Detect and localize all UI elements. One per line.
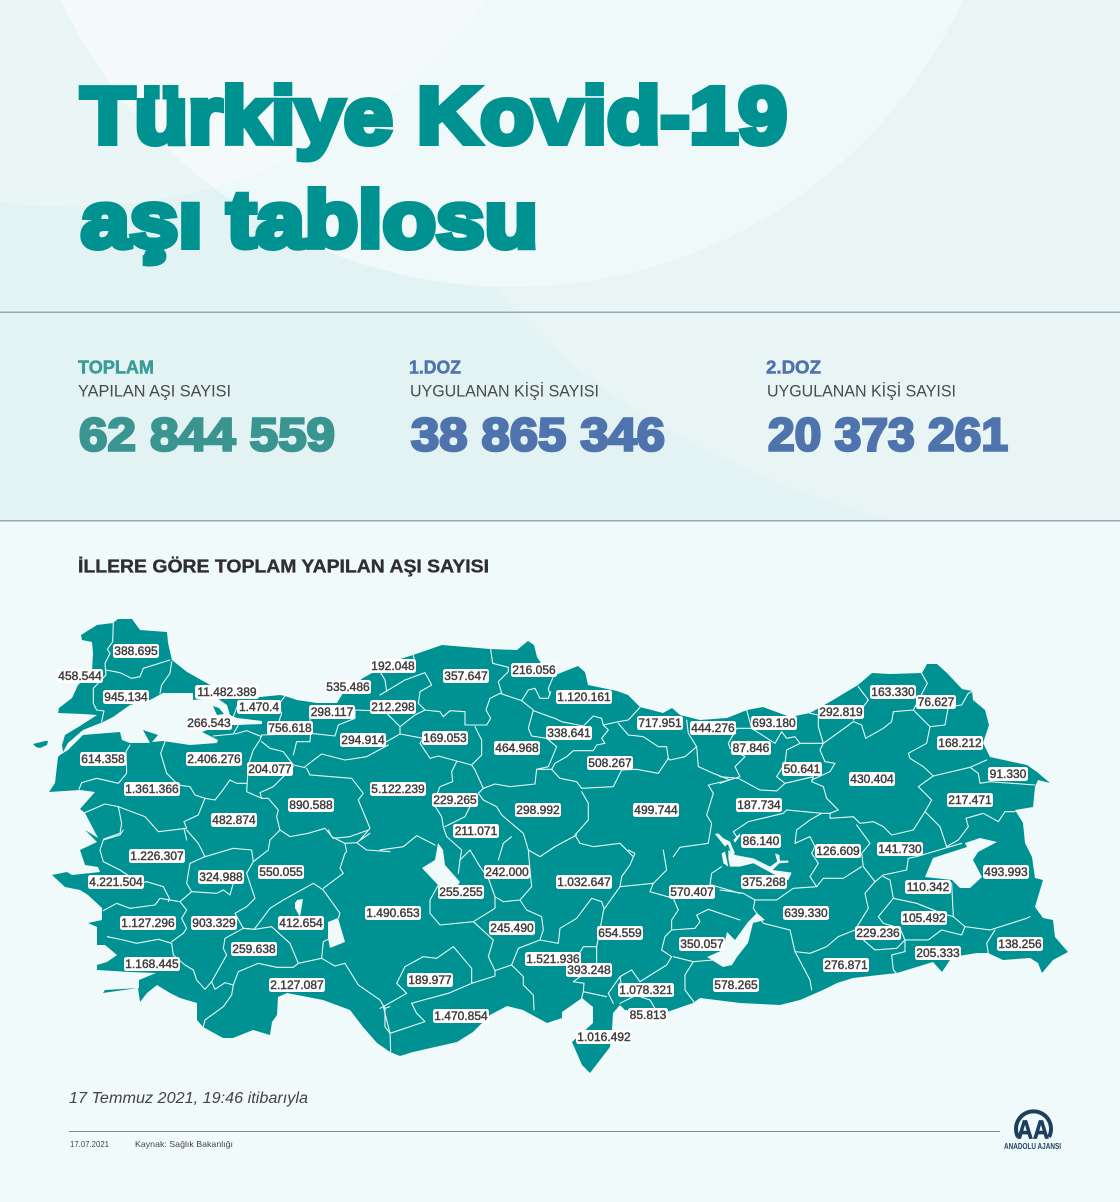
province value labels: 245.490 bbox=[490, 921, 534, 935]
province value labels: 126.609 bbox=[816, 844, 860, 858]
province value labels: 508.267 bbox=[588, 756, 632, 770]
province value labels: 464.968 bbox=[495, 741, 539, 755]
province value labels: 11.482.389 bbox=[197, 685, 257, 699]
province value labels: 163.330 bbox=[871, 685, 915, 699]
province value labels: 1.226.307 bbox=[130, 849, 184, 863]
province value labels: 1.521.936 bbox=[526, 952, 580, 966]
map of Turkey bbox=[33, 619, 1068, 1073]
province value labels: 350.057 bbox=[680, 937, 724, 951]
province value labels: 298.992 bbox=[516, 803, 560, 817]
Anadolu Ajansı logo: ANADOLU AJANSI bbox=[1004, 1141, 1061, 1151]
province value labels: 187.734 bbox=[737, 798, 781, 812]
stat: 1. doz: 1.DOZ bbox=[409, 358, 461, 378]
province value labels: 388.695 bbox=[114, 644, 158, 658]
province value labels: 255.255 bbox=[439, 885, 483, 899]
province value labels: 211.071 bbox=[455, 824, 498, 838]
province value labels: 614.358 bbox=[81, 752, 125, 766]
province value labels: 259.638 bbox=[232, 942, 276, 956]
province value labels: 229.236 bbox=[856, 926, 900, 940]
map section background bbox=[0, 521, 1120, 1202]
province value labels: 205.333 bbox=[916, 946, 960, 960]
province value labels: 292.819 bbox=[819, 705, 863, 719]
province value labels: 550.055 bbox=[259, 865, 303, 879]
province value labels: 756.618 bbox=[268, 721, 312, 735]
province value labels: 482.874 bbox=[212, 813, 256, 827]
title: aşı tablosu bbox=[81, 175, 538, 264]
province value labels: 493.993 bbox=[984, 865, 1028, 879]
province value labels: 266.543 bbox=[187, 716, 231, 730]
stat: toplam: 62 844 559 bbox=[79, 408, 335, 460]
province value labels: 212.298 bbox=[371, 700, 415, 714]
province value labels: 1.470.4 bbox=[239, 700, 279, 714]
province value labels: 86.140 bbox=[743, 834, 780, 848]
province value labels: 1.016.492 bbox=[577, 1030, 631, 1044]
footer rule bbox=[69, 1131, 1000, 1132]
province value labels: 535.486 bbox=[326, 680, 370, 694]
province value labels: 242.000 bbox=[485, 865, 529, 879]
province value labels: 1.470.854 bbox=[434, 1009, 488, 1023]
Anadolu Ajansı logo bbox=[1004, 1111, 1061, 1151]
province value labels: 412.654 bbox=[279, 916, 323, 930]
province value labels: 217.471 bbox=[948, 793, 992, 807]
province value labels: 499.744 bbox=[634, 803, 678, 817]
province value labels: 276.871 bbox=[824, 958, 868, 972]
province value labels: 87.846 bbox=[733, 741, 770, 755]
stat: toplam: YAPILAN AŞI SAYISI bbox=[78, 382, 231, 400]
stat: 2. doz: UYGULANAN KİŞİ SAYISI bbox=[767, 382, 956, 400]
province value labels: 85.813 bbox=[630, 1008, 667, 1022]
lakes bbox=[295, 833, 997, 967]
divider bottom bbox=[0, 520, 1120, 522]
province value labels: 141.730 bbox=[878, 842, 922, 856]
province value labels: 204.077 bbox=[248, 762, 292, 776]
province value labels: 430.404 bbox=[850, 772, 894, 786]
stat: 1. doz: 38 865 346 bbox=[411, 408, 665, 460]
title bbox=[81, 71, 787, 264]
province value labels: 693.180 bbox=[752, 716, 796, 730]
province value labels: 110.342 bbox=[907, 880, 950, 894]
province value labels: 1.361.366 bbox=[125, 782, 179, 796]
province value labels: 458.544 bbox=[58, 669, 102, 683]
province value labels: 168.212 bbox=[938, 736, 982, 750]
province value labels: 294.914 bbox=[341, 733, 385, 747]
footer source: Kaynak: Sağlık Bakanlığı bbox=[135, 1139, 233, 1149]
stat: 1. doz bbox=[409, 358, 665, 460]
province value labels: 50.641 bbox=[784, 762, 821, 776]
province value labels: 192.048 bbox=[371, 659, 415, 673]
province value labels: 1.168.445 bbox=[125, 957, 179, 971]
province value labels: 5.122.239 bbox=[371, 782, 425, 796]
stat: 1. doz: UYGULANAN KİŞİ SAYISI bbox=[410, 382, 599, 400]
province value labels: 578.265 bbox=[714, 978, 758, 992]
province value labels: 189.977 bbox=[408, 973, 452, 987]
date note: 17 Temmuz 2021, 19:46 itibarıyla bbox=[69, 1090, 308, 1107]
province value labels: 903.329 bbox=[192, 916, 236, 930]
province value labels: 91.330 bbox=[990, 767, 1027, 781]
stat: 2. doz: 20 373 261 bbox=[768, 408, 1008, 460]
province value labels: 1.078.321 bbox=[619, 983, 673, 997]
province value labels: 324.988 bbox=[199, 870, 243, 884]
province value labels: 2.127.087 bbox=[270, 978, 324, 992]
province value labels: 639.330 bbox=[784, 906, 828, 920]
Anadolu Ajansı logo: AA bbox=[1017, 1114, 1049, 1144]
province value labels: 1.490.653 bbox=[366, 906, 420, 920]
province value labels: 216.056 bbox=[512, 663, 556, 677]
province value labels: 2.406.276 bbox=[187, 752, 241, 766]
province value labels: 138.256 bbox=[998, 937, 1042, 951]
footer date: 17.07.2021 bbox=[70, 1139, 109, 1149]
stat: toplam bbox=[78, 358, 335, 460]
province value labels: 1.120.161 bbox=[557, 690, 611, 704]
province value labels: 945.134 bbox=[104, 690, 148, 704]
province borders bbox=[79, 623, 1035, 1052]
province value labels: 4.221.504 bbox=[89, 875, 143, 889]
divider top bbox=[0, 312, 1120, 313]
province value labels: 393.248 bbox=[567, 963, 611, 977]
province value labels: 298.117 bbox=[311, 705, 354, 719]
stat: 2. doz bbox=[766, 358, 1008, 460]
province value labels: 105.492 bbox=[902, 911, 946, 925]
province value labels: 357.647 bbox=[444, 669, 488, 683]
province value labels: 169.053 bbox=[423, 731, 467, 745]
province value labels: 717.951 bbox=[638, 716, 682, 730]
map heading: İLLERE GÖRE TOPLAM YAPILAN AŞI SAYISI bbox=[78, 556, 489, 576]
province value labels bbox=[57, 644, 1043, 1044]
province value labels: 444.276 bbox=[691, 721, 735, 735]
province value labels: 654.559 bbox=[598, 926, 642, 940]
province value labels: 338.641 bbox=[547, 726, 591, 740]
header background bbox=[0, 0, 1120, 521]
province value labels: 1.032.647 bbox=[557, 875, 611, 889]
province value labels: 890.588 bbox=[289, 798, 333, 812]
stat: toplam: TOPLAM bbox=[78, 358, 154, 378]
province value labels: 76.627 bbox=[918, 695, 955, 709]
province value labels: 375.268 bbox=[742, 875, 786, 889]
province value labels: 1.127.296 bbox=[121, 916, 175, 930]
province value labels: 570.407 bbox=[670, 885, 714, 899]
stat: 2. doz: 2.DOZ bbox=[766, 358, 821, 378]
title: Türkiye Kovid-19 bbox=[81, 71, 787, 160]
province value labels: 229.265 bbox=[433, 793, 477, 807]
